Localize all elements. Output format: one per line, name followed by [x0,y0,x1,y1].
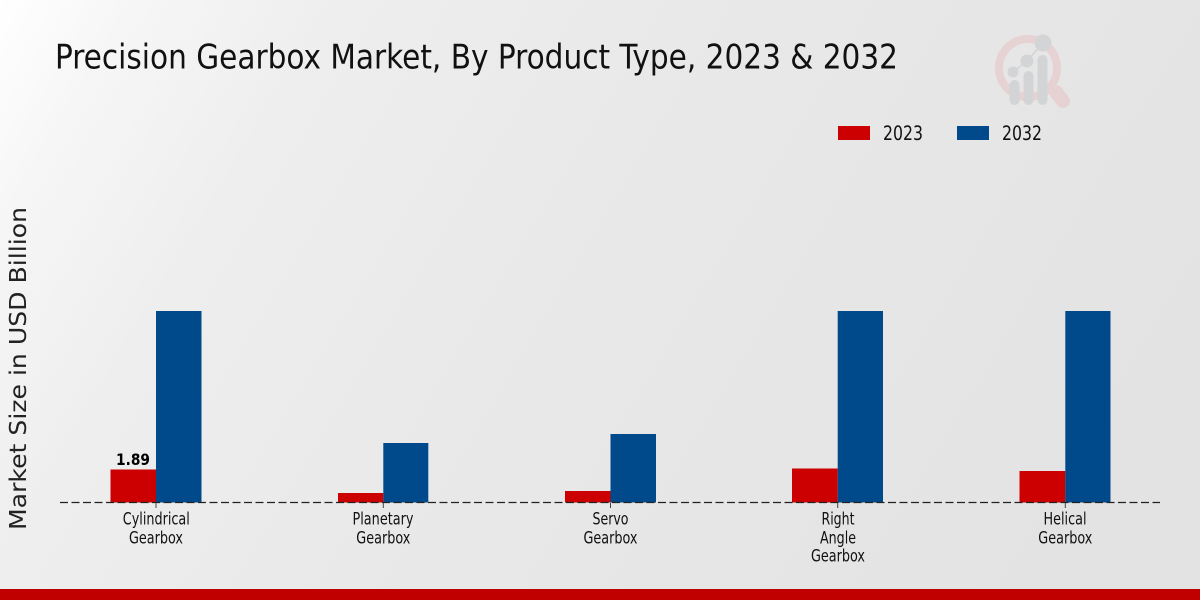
category label: Cylindrical Gearbox: Cylindrical [123,510,190,530]
category label: Servo Gearbox: Servo [592,510,628,530]
category label: Planetary Gearbox: Gearbox [356,528,410,548]
icon: magnifier logo watermark [999,34,1063,105]
category label: Servo Gearbox: Gearbox [584,528,638,548]
category label: Right Angle Gearbox [811,510,865,566]
data label: 1.89 [116,450,150,469]
category label: Cylindrical Gearbox: Gearbox [129,528,183,548]
category label: Right Angle Gearbox: Gearbox [811,546,865,566]
axis baseline [60,502,1160,504]
category label: Helical Gearbox: Helical [1044,510,1086,530]
category label: Planetary Gearbox: Planetary [352,510,414,530]
category label: Helical Gearbox: Gearbox [1038,528,1092,548]
legend: 2023 [883,122,923,145]
footer bar [0,589,1200,600]
legend: 2032 [1002,122,1042,145]
bars: Helical Gearbox [1020,311,1110,502]
category label: Planetary Gearbox [352,510,414,548]
y axis title: Market Size in USD Billion [6,207,32,530]
bars: Right Angle Gearbox [792,311,883,502]
bars: Cylindrical Gearbox [110,311,202,502]
bars: Planetary Gearbox [338,443,428,502]
bars: Servo Gearbox [565,434,656,502]
category label: Right Angle Gearbox: Right [822,510,855,530]
title: Precision Gearbox Market, By Product Type, 2023 & 2032 [55,38,898,78]
category label: Right Angle Gearbox: Angle [820,528,856,548]
category label: Helical Gearbox [1038,510,1092,548]
category label: Cylindrical Gearbox [123,510,190,548]
bar chart [60,311,1160,508]
legend [838,122,1042,145]
category label: Servo Gearbox [584,510,638,548]
